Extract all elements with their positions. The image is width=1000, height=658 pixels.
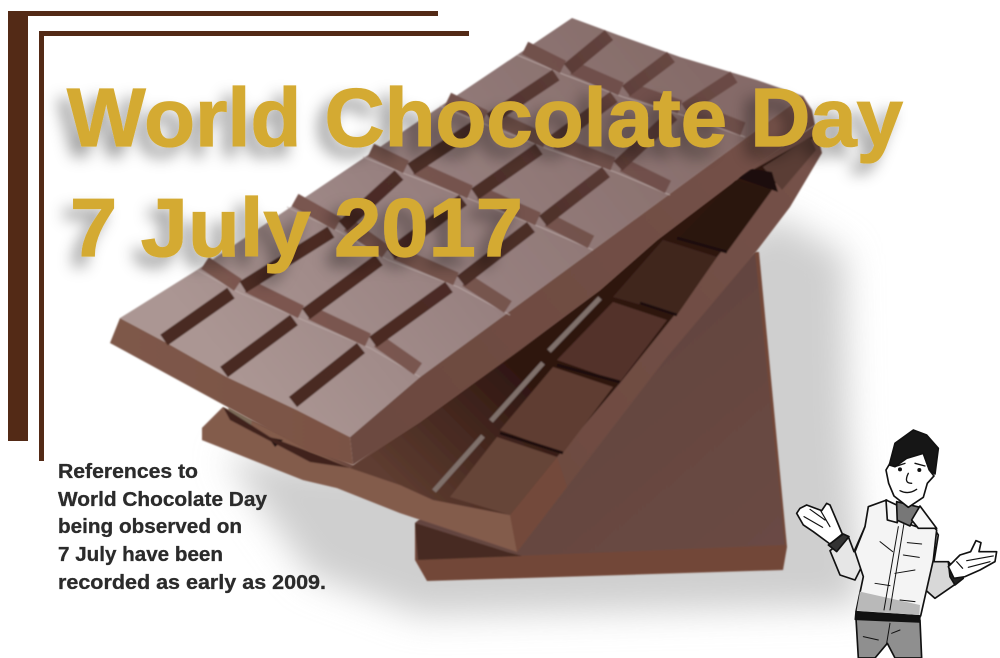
bottom chocolate plate (415, 252, 787, 581)
photo: stacked chocolate bars (110, 18, 862, 615)
left fingers (804, 509, 830, 527)
line 2: World Chocolate Day (58, 488, 268, 511)
shirt torso (855, 500, 937, 616)
bar long side (350, 96, 815, 465)
right cuff (948, 562, 963, 585)
corner facet (510, 457, 567, 552)
trousers (856, 618, 922, 658)
title (67, 71, 903, 274)
bar top face (120, 18, 803, 437)
cast shadow on table (225, 215, 862, 615)
frame: inner brown corner (39, 31, 469, 461)
line 3: being observed on (58, 515, 242, 538)
column grooves (164, 35, 734, 402)
trouser creases (863, 623, 900, 643)
left hand (797, 503, 842, 544)
left cuff (828, 534, 849, 552)
top chocolate bar (110, 18, 815, 465)
squares (450, 137, 816, 515)
right forearm sleeve (920, 530, 957, 598)
middle chocolate bar (202, 125, 822, 552)
head (886, 453, 934, 507)
shirt shadow (857, 592, 920, 615)
shirt placket (875, 523, 922, 610)
black seams (500, 238, 727, 453)
left arm sleeve (830, 527, 867, 580)
hair (889, 430, 938, 474)
right hand (948, 541, 997, 578)
body text (58, 460, 326, 594)
bar outer body (202, 125, 822, 552)
title line 1: World Chocolate Day (67, 71, 903, 164)
line 5: recorded as early as 2009. (58, 571, 326, 594)
row bevels (205, 48, 743, 369)
belt (855, 612, 920, 622)
eyes (898, 467, 921, 472)
front side (202, 407, 517, 552)
bar front side (110, 318, 353, 465)
crumb and gap (228, 407, 252, 430)
illustration: shrugging man (797, 430, 997, 658)
line 1: References to (58, 460, 198, 483)
facial features (895, 463, 925, 493)
right fingers (957, 556, 993, 568)
line 4: 7 July have been (58, 543, 223, 566)
frame: outer brown corner (8, 11, 438, 441)
row gap lines (197, 55, 745, 377)
collar (886, 500, 937, 528)
title line 2: 7 July 2017 (70, 181, 523, 274)
glossy groove highlights (434, 298, 600, 491)
neck (897, 502, 920, 526)
shaded top face (350, 135, 815, 515)
